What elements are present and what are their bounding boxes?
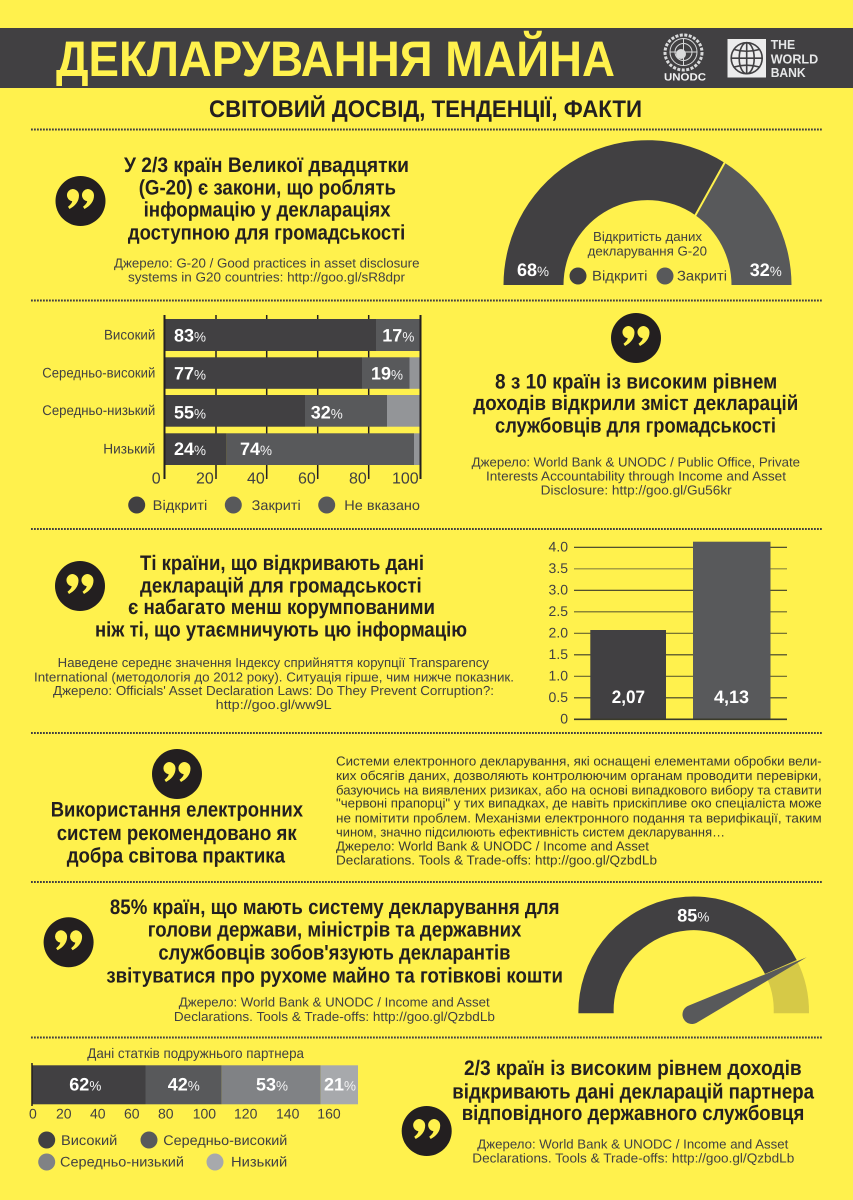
title: ДЕКЛАРУВАННЯ МАЙНА: [56, 30, 615, 87]
chart: stacked bars by income: Високий: [104, 326, 155, 342]
legend: [128, 496, 420, 514]
legend: Закриті: [252, 497, 301, 513]
body text: чином, значно підсилюють ефективність систем декларування…: [336, 825, 725, 840]
headline: добра світова практика: [67, 845, 285, 868]
logo: The World Bank: THE: [771, 37, 796, 52]
chart: G-20 semicircle: Закриті: [677, 268, 727, 284]
chart: spouse data bar: [29, 1045, 358, 1170]
chart: corruption index bars: 0.5: [549, 689, 568, 705]
chart: spouse data bar: 80: [158, 1106, 174, 1122]
body text: Declarations. Tools & Trade-offs: http://goo.gl/QzbdLb: [336, 852, 657, 867]
chart: spouse data bar: 140: [276, 1106, 300, 1122]
body text: ких обсягів даних, дозволяють контролюючим органам проводити перевірки,: [336, 768, 822, 783]
body text: Джерело: World Bank & UNODC / Income and Asset: [336, 839, 649, 854]
body text: [336, 754, 822, 867]
source: Declarations. Tools & Trade-offs: http://goo.gl/QzbdLb: [472, 1151, 794, 1166]
chart: stacked bars by income: 24%: [174, 439, 206, 459]
chart: stacked bars by income: 40: [247, 470, 265, 487]
source: Джерело: G-20 / Good practices in asset disclosure: [114, 256, 420, 271]
legend: Низький: [231, 1154, 287, 1170]
source: [472, 1136, 794, 1166]
panel: G-20 laws: [56, 154, 420, 285]
chart: stacked bars by income: 0: [152, 470, 161, 487]
source: Interests Accountability through Income and Asset: [486, 469, 786, 484]
headline: голови держави, міністрів та державних: [148, 919, 522, 942]
chart: spouse data bar: 120: [234, 1106, 258, 1122]
source: Джерело: World Bank & UNODC / Public Office, Private: [472, 455, 800, 470]
headline: [452, 1057, 814, 1125]
headline: відповідного державного службовця: [462, 1102, 804, 1125]
chart: corruption index bars: 4,13: [714, 687, 749, 707]
chart: corruption index bars: 0: [560, 710, 568, 726]
headline: доходів відкрили зміст декларацій: [473, 392, 798, 415]
source: Джерело: Officials' Asset Declaration Laws: Do They Prevent Corruption?:: [53, 683, 494, 698]
chart: spouse data bar: 20: [56, 1106, 72, 1122]
source: Джерело: World Bank & UNODC / Income and Asset: [477, 1136, 789, 1151]
source: Джерело: World Bank & UNODC / Income and Asset: [179, 995, 490, 1010]
logo: The World Bank: [728, 37, 818, 80]
chart: stacked bars by income: [42, 315, 421, 514]
headline: [106, 896, 563, 988]
headline: [124, 154, 409, 244]
logo: UNODC: UNODC: [664, 72, 706, 84]
chart: corruption index bars: [549, 539, 787, 726]
headline: службовців для громадськості: [495, 414, 776, 437]
source: systems in G20 countries: http://goo.gl/sR8dpr: [128, 270, 406, 285]
headline: ніж ті, що утаємничують цю інформацію: [95, 619, 467, 642]
chart: stacked bars by income: 77%: [174, 363, 206, 383]
source: Наведене середнє значення Індексу сприйняття корупції Transparency: [58, 655, 489, 670]
subtitle: СВІТОВИЙ ДОСВІД, ТЕНДЕНЦІЇ, ФАКТИ: [209, 95, 642, 123]
chart: corruption index bars: 3.5: [549, 560, 568, 576]
headline: систем рекомендовано як: [57, 822, 297, 845]
chart: corruption index bars: 1.5: [549, 646, 568, 662]
headline: 85% країн, що мають систему декларування для: [110, 896, 560, 919]
headline: У 2/3 країн Великої двадцятки: [124, 154, 409, 177]
headline: [51, 799, 303, 868]
headline: 2/3 країн із високим рівнем доходів: [464, 1057, 802, 1080]
headline: (G-20) є закони, що роблять: [139, 177, 396, 200]
chart: stacked bars by income: 83%: [174, 326, 206, 346]
body text: базуючись на виявлених ризиках, або на основі випадкового вибору та ставити: [336, 782, 822, 797]
source: [472, 455, 800, 497]
chart: stacked bars by income: 55%: [174, 402, 206, 422]
headline: звітуватися про рухоме майно та готівкові кошти: [106, 965, 563, 988]
panel: 85 percent: [44, 896, 563, 1024]
header band: [0, 28, 853, 88]
source: Disclosure: http://goo.gl/Gu56kr: [541, 482, 732, 497]
chart: stacked bars by income: 80: [349, 470, 367, 487]
headline: є набагато менш корумпованими: [128, 596, 435, 619]
headline: [95, 552, 467, 642]
source: http://goo.gl/ww9L: [216, 697, 332, 712]
logo: UNODC: [664, 35, 706, 84]
icon: quote: [402, 1106, 452, 1156]
chart: stacked bars by income: 74%: [240, 439, 272, 459]
headline: службовців зобов'язують декларантів: [158, 941, 510, 964]
panel: electronic systems: [51, 749, 822, 868]
chart: spouse data bar: 100: [193, 1106, 216, 1122]
body text: не помітити проблем. Механізми електронного подання та верифікації, таким: [336, 810, 822, 825]
legend: Високий: [61, 1132, 117, 1148]
chart: corruption index bars: 3.0: [549, 582, 568, 598]
body text: Системи електронного декларування, які оснащені елементами обробки вели-: [336, 754, 822, 769]
logo: The World Bank: BANK: [771, 65, 806, 80]
source: International (методологія до 2012 року). Ситуація гірше, чим нижче показник.: [34, 670, 514, 685]
source: [34, 655, 514, 712]
chart: stacked bars by income: 19%: [371, 363, 403, 383]
chart: stacked bars by income: 32%: [311, 402, 343, 422]
chart: G-20 semicircle: 68%: [517, 260, 549, 280]
chart: stacked bars by income: 20: [196, 470, 214, 487]
headline: декларацій для громадськості: [140, 575, 422, 598]
legend: [38, 1132, 287, 1170]
headline: 8 з 10 країн із високим рівнем: [495, 370, 777, 393]
chart: stacked bars by income: Низький: [103, 440, 155, 456]
logo: The World Bank: WORLD: [771, 51, 818, 66]
chart: G-20 semicircle: декларування G-20: [588, 243, 707, 258]
headline: доступною для громадськості: [128, 221, 405, 244]
chart: stacked bars by income: 60: [298, 470, 316, 487]
chart: spouse data bar: 160: [317, 1106, 341, 1122]
panel: corruption: [34, 552, 514, 712]
chart: gauge 85 percent: 85%: [677, 906, 709, 926]
legend: Середньо-високий: [163, 1132, 287, 1148]
chart: G-20 semicircle: [504, 140, 792, 285]
chart: spouse data bar: 42%: [168, 1075, 200, 1095]
panel: partner data: [402, 1057, 814, 1166]
chart: spouse data bar: 40: [90, 1106, 106, 1122]
chart: corruption index bars: 2.0: [549, 624, 568, 640]
headline: Ті країни, що відкривають дані: [140, 552, 424, 575]
chart: stacked bars by income: Середньо-низький: [42, 402, 155, 418]
icon: quote: [152, 749, 202, 799]
headline: Використання електронних: [51, 799, 303, 822]
chart: stacked bars by income: 17%: [382, 326, 414, 346]
headline: інформацію у деклараціях: [144, 199, 391, 222]
panel: high income countries: [472, 313, 800, 497]
chart: stacked bars by income: 100: [392, 470, 419, 487]
chart: spouse data bar: 21%: [324, 1075, 356, 1095]
icon: quote: [55, 561, 105, 611]
chart: G-20 semicircle: Відкриті: [592, 268, 647, 284]
chart: spouse data bar: 60: [124, 1106, 140, 1122]
chart: corruption index bars: 4.0: [549, 539, 568, 555]
chart: spouse data bar: 62%: [69, 1075, 101, 1095]
source: [114, 256, 420, 285]
chart: spouse data bar: 53%: [256, 1075, 288, 1095]
source: Declarations. Tools & Trade-offs: http://goo.gl/QzbdLb: [174, 1009, 495, 1024]
chart: gauge 85 percent: [578, 896, 809, 1024]
legend: Відкриті: [153, 497, 207, 513]
headline: відкривають дані декларацій партнера: [452, 1080, 814, 1103]
headline: [473, 370, 798, 437]
chart: corruption index bars: 1.0: [549, 668, 568, 684]
chart title: Дані статків подружнього партнера: [87, 1045, 304, 1061]
chart: G-20 semicircle: 32%: [750, 260, 782, 280]
legend: Середньо-низький: [60, 1154, 184, 1170]
legend: Не вказано: [344, 497, 420, 513]
icon: quote: [56, 176, 106, 226]
icon: quote: [44, 917, 94, 967]
chart: G-20 semicircle: Відкритість даних: [593, 229, 703, 244]
source: [174, 995, 495, 1024]
chart: spouse data bar: 0: [29, 1106, 37, 1122]
chart: corruption index bars: 2.5: [549, 603, 568, 619]
body text: "червоні прапорці" у тих випадках, де навіть прискіпливе око спеціаліста може: [336, 796, 822, 811]
chart: stacked bars by income: Середньо-високий: [42, 365, 155, 381]
chart: corruption index bars: 2,07: [612, 687, 645, 707]
icon: quote: [611, 313, 661, 363]
